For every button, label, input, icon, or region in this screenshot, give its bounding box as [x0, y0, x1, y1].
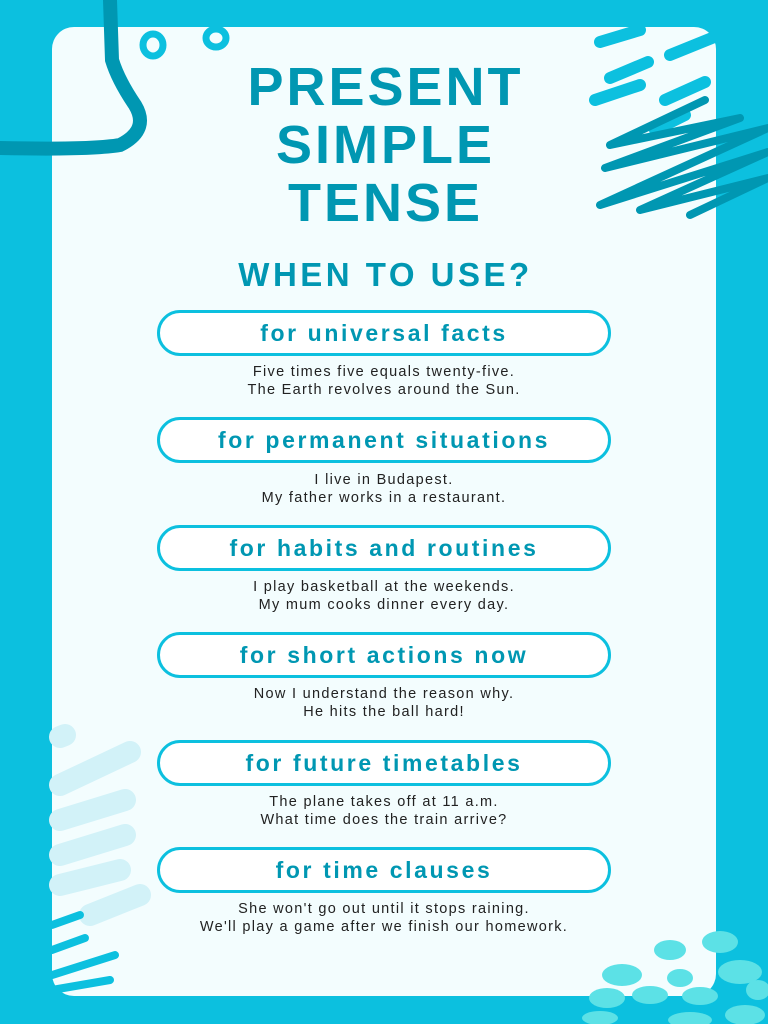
- pill: future timetables: [157, 740, 611, 786]
- examples: habits: [253, 579, 515, 613]
- examples: habits: My mum cooks dinner every day.: [259, 597, 509, 613]
- subheading: WHEN TO USE?: [238, 256, 533, 293]
- examples: universal facts: The Earth revolves around the Sun.: [247, 382, 521, 398]
- pill: short actions: for short actions now: [240, 642, 528, 668]
- title: TENSE: [288, 173, 483, 233]
- examples: future timetables: What time does the train arrive?: [260, 812, 508, 828]
- examples: permanent situations: [262, 472, 506, 506]
- pill: habits: for habits and routines: [230, 535, 538, 561]
- title: PRESENT: [247, 57, 524, 117]
- pill: permanent situations: for permanent situations: [218, 427, 550, 453]
- icon: hook line top-left: [0, 0, 140, 149]
- examples: permanent situations: I live in Budapest.: [314, 472, 454, 488]
- examples: future timetables: [260, 794, 508, 828]
- examples: short actions: Now I understand the reason why.: [254, 686, 514, 702]
- pill: universal facts: [157, 310, 611, 356]
- icon: circles top-left: [143, 29, 226, 56]
- icon: scribble top-right: [600, 100, 768, 215]
- icon: dots bottom-right: [582, 931, 768, 1024]
- examples: future timetables: The plane takes off at 11 a.m.: [269, 794, 499, 810]
- title: [247, 57, 524, 233]
- examples: short actions: [254, 686, 514, 720]
- pill: future timetables: for future timetables: [246, 750, 522, 776]
- examples: habits: I play basketball at the weekends.: [253, 579, 515, 595]
- icon: light dashes left: [60, 735, 140, 915]
- pill: time clauses: [157, 847, 611, 893]
- examples: universal facts: [247, 364, 521, 398]
- title: SIMPLE: [276, 115, 495, 175]
- examples: short actions: He hits the ball hard!: [303, 704, 465, 720]
- icon: scribble bottom-left: [52, 915, 115, 990]
- examples: universal facts: Five times five equals twenty-five.: [253, 364, 515, 380]
- pill: universal facts: for universal facts: [260, 320, 508, 346]
- pill: short actions: [157, 632, 611, 678]
- examples: permanent situations: My father works in a restaurant.: [262, 490, 506, 506]
- icon: dashes top-right: [595, 30, 712, 130]
- examples: time clauses: We'll play a game after we finish our homework.: [200, 919, 568, 935]
- examples: time clauses: She won't go out until it stops raining.: [238, 901, 530, 917]
- pill: permanent situations: [157, 417, 611, 463]
- pill: time clauses: for time clauses: [276, 857, 492, 883]
- examples: time clauses: [200, 901, 568, 935]
- pill: habits: [157, 525, 611, 571]
